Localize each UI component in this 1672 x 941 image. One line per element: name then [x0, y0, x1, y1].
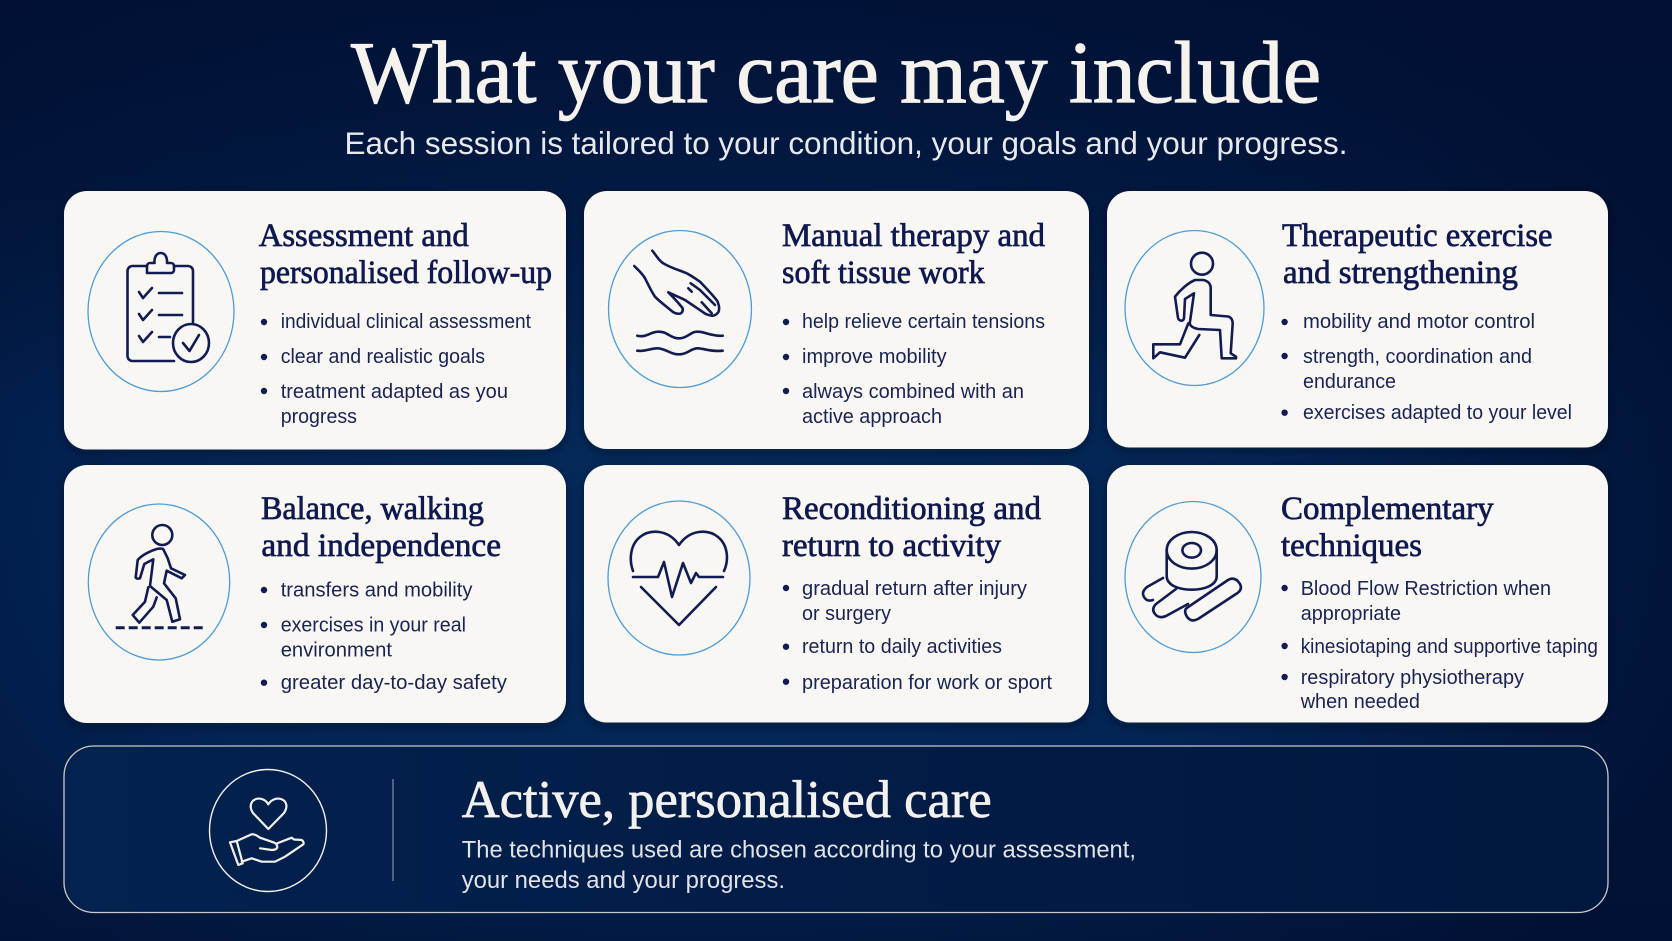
heading: personalised follow-up — [260, 255, 552, 291]
bullet list: respiratory physiotherapy — [1301, 666, 1525, 689]
bullet list: gradual return after injury — [802, 577, 1028, 600]
panel: reconditioning and return to activity — [584, 465, 1089, 722]
heading: techniques — [1281, 528, 1422, 564]
heading: Active, personalised care — [462, 771, 992, 829]
title: What your care may include — [351, 25, 1321, 122]
bullet list: Blood Flow Restriction when — [1301, 577, 1551, 600]
heading: Assessment and — [259, 218, 469, 254]
heading: Therapeutic exercise — [1282, 218, 1552, 254]
panel: manual therapy and soft tissue work — [584, 191, 1089, 449]
panel: complementary techniques — [1107, 465, 1608, 722]
heading — [261, 491, 501, 564]
heading — [1281, 491, 1494, 564]
heading: return to activity — [782, 528, 1001, 564]
bullet list: always combined with an — [802, 380, 1024, 403]
bullet list: clear and realistic goals — [281, 345, 485, 368]
panel: therapeutic exercise and strengthening — [1107, 191, 1608, 448]
bullet list — [261, 310, 531, 428]
bullet list: transfers and mobility — [281, 579, 473, 602]
divider — [392, 779, 394, 881]
icon: heart with pulse — [608, 501, 750, 655]
panel: active, personalised care — [64, 746, 1608, 912]
bullet list: exercises in your real — [281, 614, 466, 637]
icon: tape roll and strips — [1125, 502, 1261, 652]
bullet list: kinesiotaping and supportive taping — [1301, 635, 1598, 658]
subtitle: Each session is tailored to your condition, your goals and your progress. — [344, 125, 1348, 161]
icon: person walking on dashed line — [88, 504, 230, 660]
bullet list — [261, 579, 508, 694]
icon: clipboard with checklist — [88, 232, 234, 392]
heading — [1282, 218, 1552, 291]
description — [462, 837, 1136, 894]
heading: Manual therapy and — [782, 218, 1045, 254]
bullet list: active approach — [802, 405, 942, 428]
description: your needs and your progress. — [462, 867, 785, 894]
icon: hand over waves — [608, 230, 752, 388]
bullet list — [1281, 310, 1572, 424]
panel: balance, walking and independence — [64, 465, 566, 723]
bullet list: help relieve certain tensions — [802, 310, 1045, 333]
bullet list: individual clinical assessment — [281, 310, 531, 333]
heading: and independence — [261, 528, 501, 564]
bullet list — [783, 310, 1045, 428]
bullet list: treatment adapted as you — [281, 380, 508, 403]
heading: Balance, walking — [261, 491, 484, 527]
bullet list: or surgery — [802, 602, 892, 625]
heading — [259, 218, 552, 291]
panel: assessment and personalised follow-up — [64, 191, 566, 450]
heading: Complementary — [1281, 491, 1494, 527]
bullet list: appropriate — [1301, 602, 1401, 625]
bullet list: preparation for work or sport — [802, 671, 1052, 694]
bullet list: improve mobility — [802, 345, 947, 368]
heading — [782, 218, 1045, 291]
bullet list: mobility and motor control — [1303, 310, 1535, 333]
bullet list: endurance — [1303, 370, 1396, 393]
description: The techniques used are chosen according to your assessment, — [462, 837, 1136, 864]
bullet list: progress — [281, 405, 357, 428]
bullet list — [783, 577, 1052, 694]
bullet list: exercises adapted to your level — [1303, 401, 1572, 424]
bullet list: when needed — [1300, 690, 1420, 713]
heading: Reconditioning and — [782, 491, 1041, 527]
icon: hand holding heart — [210, 770, 326, 892]
bullet list: return to daily activities — [802, 635, 1002, 658]
heading: soft tissue work — [782, 255, 985, 291]
bullet list: environment — [281, 639, 392, 662]
bullet list — [1281, 577, 1598, 713]
heading: and strengthening — [1283, 255, 1518, 291]
icon: person lunging — [1125, 230, 1264, 386]
bullet list: strength, coordination and — [1303, 345, 1532, 368]
heading — [782, 491, 1041, 564]
bullet list: greater day-to-day safety — [281, 671, 508, 694]
